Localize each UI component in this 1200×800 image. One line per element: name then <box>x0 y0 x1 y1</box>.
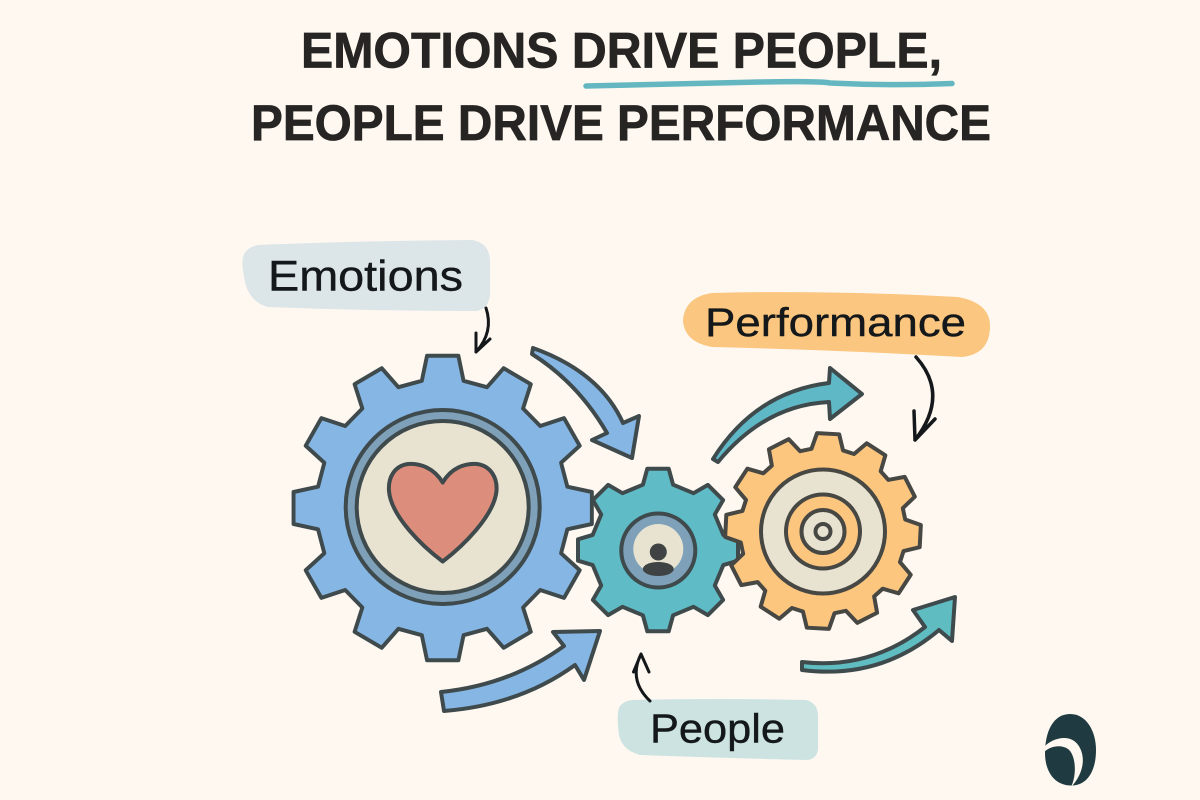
arrow: blue top <box>532 348 639 458</box>
logo <box>1044 714 1096 787</box>
label: Performance: Performance <box>705 301 966 345</box>
label: Emotions <box>242 240 490 311</box>
title underline <box>586 82 952 86</box>
title <box>251 22 991 151</box>
label: Emotions: Emotions <box>268 252 463 300</box>
label: Performance <box>683 292 990 357</box>
arrow: Emotions pointer <box>476 308 490 352</box>
gear: performance (orange) <box>721 429 925 633</box>
gear: people (teal) <box>578 469 738 631</box>
gear: emotions (blue) <box>294 356 592 660</box>
title: EMOTIONS DRIVE PEOPLE, <box>301 22 942 78</box>
icon: target <box>761 470 885 594</box>
arrow: blue bottom <box>441 631 600 711</box>
title: PEOPLE DRIVE PERFORMANCE <box>251 95 991 151</box>
icon: heart <box>389 464 497 562</box>
label: People <box>618 699 818 760</box>
arrow: teal bottom <box>802 597 955 672</box>
arrow: Performance pointer <box>914 357 935 440</box>
arrow: People pointer <box>634 654 650 701</box>
icon: person <box>643 544 674 576</box>
arrow: teal top <box>713 368 862 462</box>
label: People: People <box>650 706 785 752</box>
